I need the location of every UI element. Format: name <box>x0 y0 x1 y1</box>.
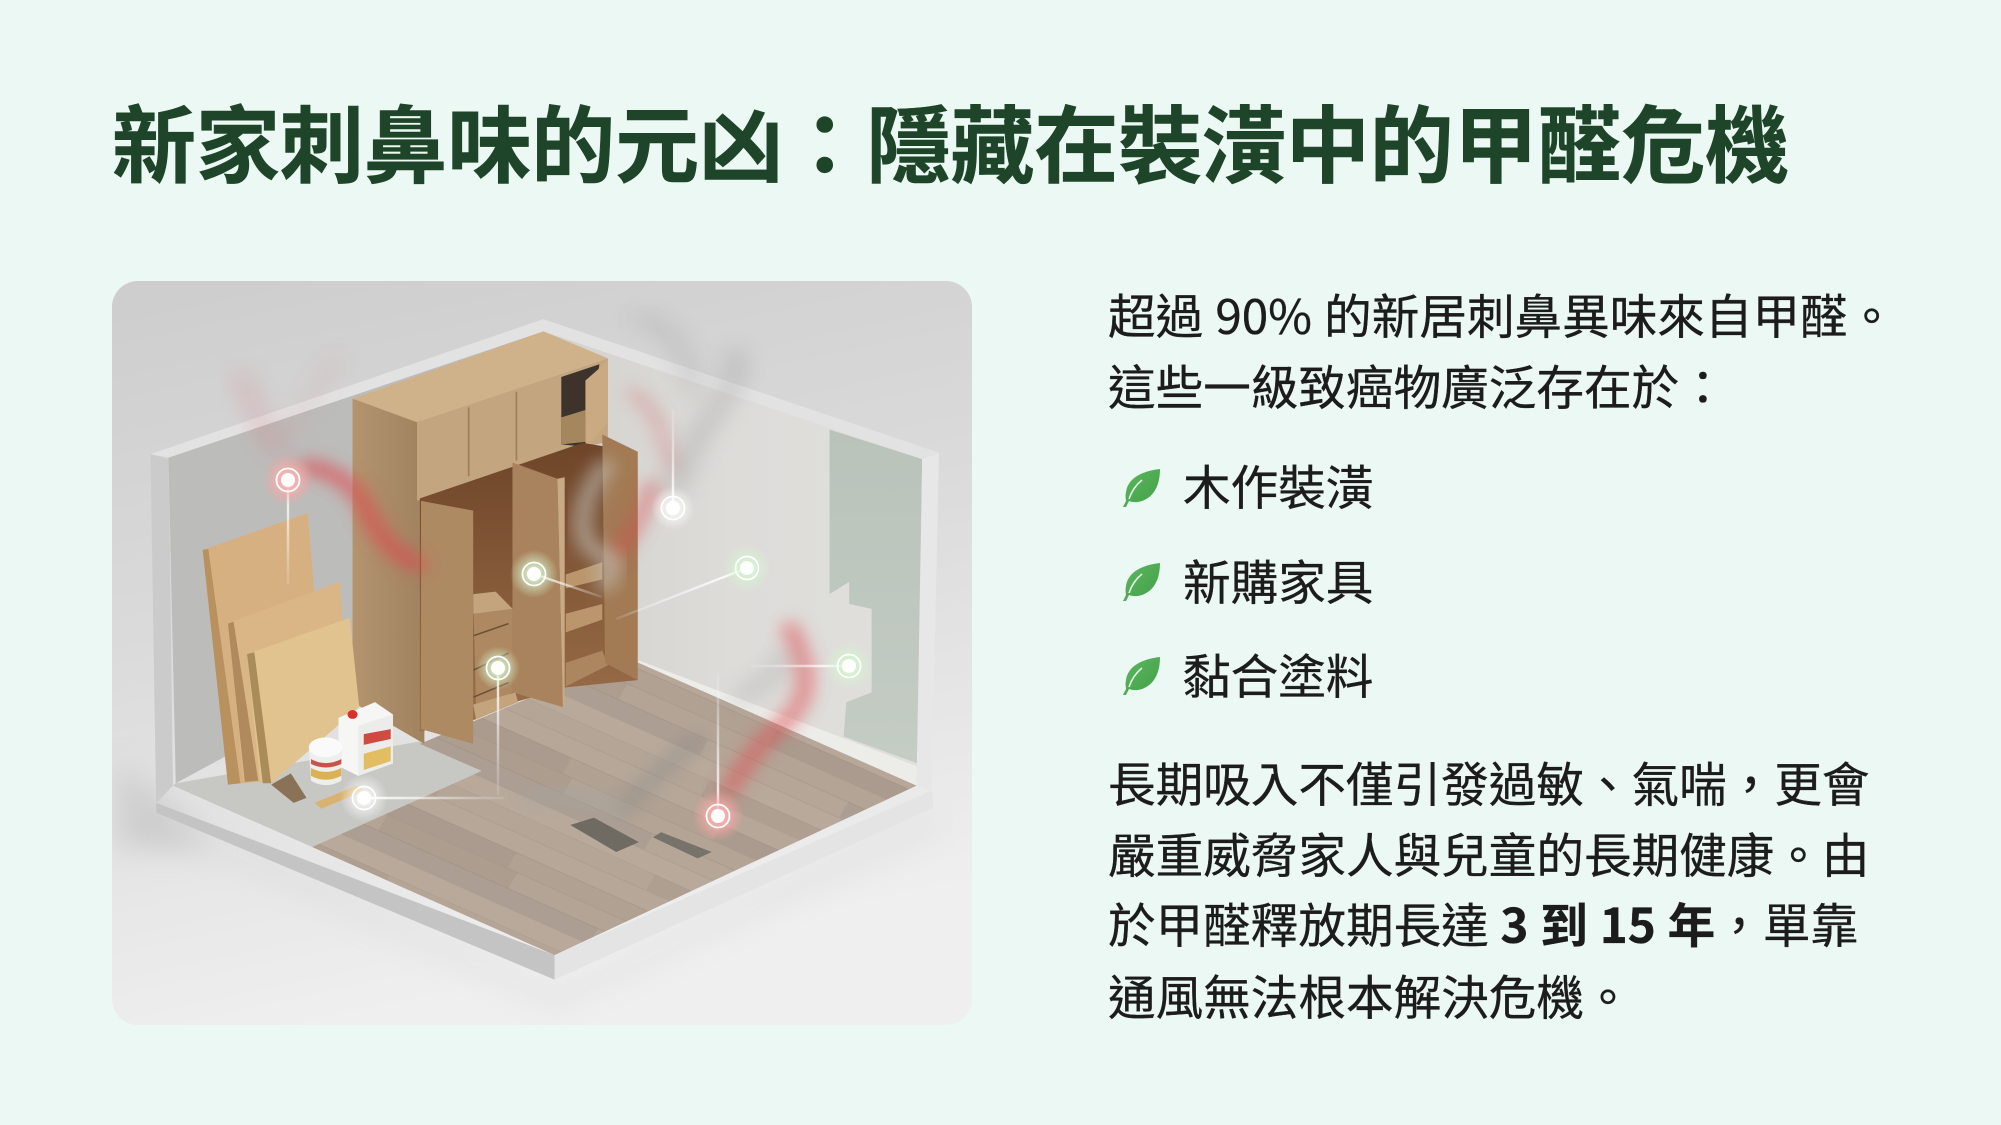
closing paragraph: 嚴重威脅家人與兒童的長期健康。由 <box>1108 818 1870 887</box>
wooden cabinet <box>353 331 638 744</box>
list item: new furniture: 新購家具 <box>1183 545 1373 614</box>
room shell <box>117 319 939 1007</box>
panel: isometric room illustration <box>112 281 972 1025</box>
marker nodes <box>262 454 873 842</box>
closing paragraph: 於甲醛釋放期長達 3 到 15 年，單靠 <box>1108 888 1858 957</box>
title: 新家刺鼻味的元凶：隱藏在裝潢中的甲醛危機 <box>112 80 1789 201</box>
list item: woodwork: 木作裝潢 <box>1183 450 1373 519</box>
icon: leaf 1 <box>1123 469 1160 507</box>
intro text line 2: 這些一級致癌物廣泛存在於： <box>1108 350 1727 419</box>
leader lines <box>288 410 849 816</box>
closing paragraph: 長期吸入不僅引發過敏、氣喘，更會 <box>1108 747 1870 816</box>
icon: leaf 3 <box>1123 657 1160 695</box>
icon: leaf 2 <box>1123 563 1160 601</box>
list item: adhesives and paint: 黏合塗料 <box>1183 639 1373 708</box>
red and grey fumes <box>240 319 805 810</box>
adhesive jug and paint can <box>271 702 393 809</box>
plywood boards <box>203 513 359 785</box>
closing paragraph: 通風無法根本解決危機。 <box>1108 960 1632 1029</box>
intro text: 超過 90% 的新居刺鼻異味來自甲醛。 <box>1108 279 1895 348</box>
